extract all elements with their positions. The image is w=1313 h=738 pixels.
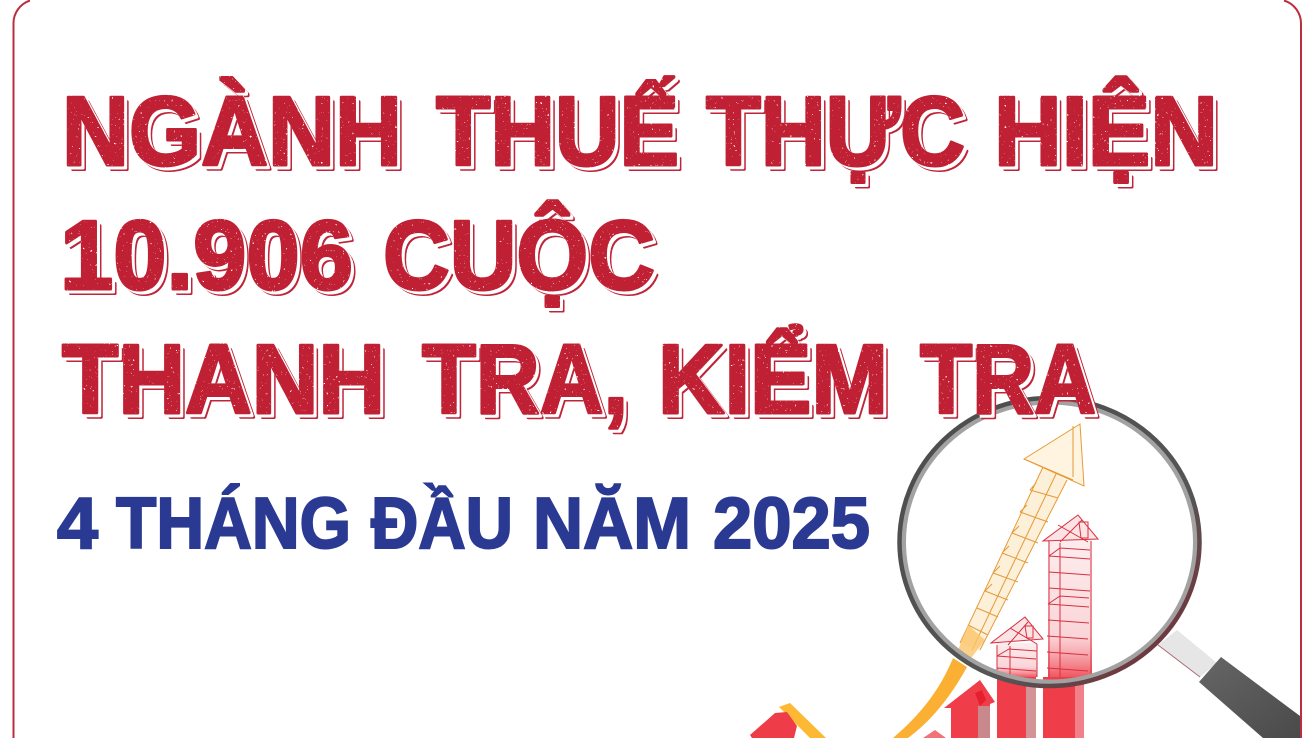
title line 3 bbox=[62, 324, 1096, 434]
title line 3: KIỂM bbox=[658, 324, 888, 434]
title line 3: TRA bbox=[920, 324, 1096, 434]
title line 1 bbox=[62, 76, 1218, 186]
wireframe arrow bbox=[958, 424, 1084, 662]
red house bar, far left bbox=[750, 712, 797, 738]
title line 1: THỰC bbox=[706, 76, 965, 186]
subtitle: NĂM bbox=[533, 484, 691, 564]
solid red bar, short bbox=[997, 677, 1036, 738]
subtitle: THÁNG bbox=[116, 484, 351, 564]
title line 1: HIỆN bbox=[994, 76, 1218, 186]
orange rising curve bbox=[893, 658, 967, 738]
title line 2: 10.906 bbox=[60, 200, 353, 310]
title line 2 bbox=[60, 200, 655, 310]
subtitle bbox=[57, 483, 870, 564]
title line 3: THANH bbox=[62, 324, 385, 434]
wireframe house, small bbox=[991, 617, 1043, 677]
red house bar, middle bbox=[944, 680, 995, 738]
subtitle: ĐẦU bbox=[371, 483, 513, 564]
magnifier lens ring bbox=[900, 398, 1200, 686]
title line 1: THUẾ bbox=[436, 76, 679, 186]
small pink house tip bbox=[923, 730, 946, 738]
title line 2: CUỘC bbox=[383, 200, 655, 310]
title line 3: TRA, bbox=[422, 324, 628, 434]
magnifier handle bbox=[1158, 630, 1300, 738]
wireframe house, tall bbox=[1043, 515, 1098, 677]
title bbox=[60, 76, 1218, 434]
solid orange ribbon, lower left bbox=[779, 703, 826, 738]
illustration: magnifier over rising chart bbox=[750, 398, 1300, 738]
subtitle: 4 bbox=[57, 484, 98, 564]
title line 1: NGÀNH bbox=[62, 76, 402, 186]
solid red bar, tall bbox=[1043, 677, 1084, 738]
subtitle: 2025 bbox=[713, 484, 870, 564]
